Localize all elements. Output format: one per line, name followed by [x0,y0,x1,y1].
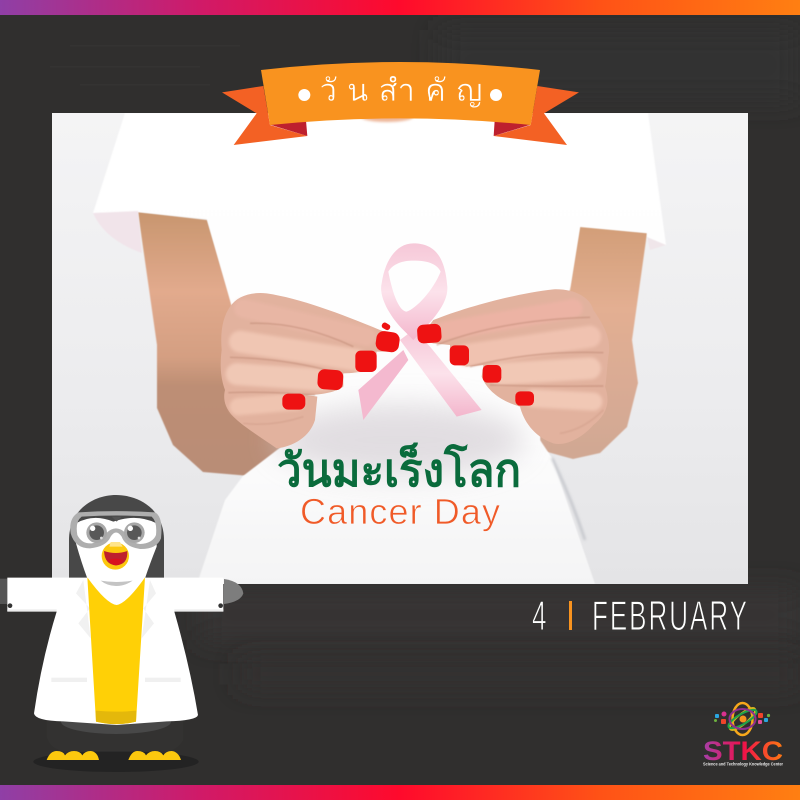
coat buttons [8,603,12,608]
banner main [261,62,540,125]
bottom gradient bar [0,785,800,800]
neck peek under banner [361,118,414,124]
penguin mascot in lab coat [0,495,243,772]
banner left tail [222,86,307,145]
hair [69,495,164,578]
goggles [70,511,162,549]
pink ribbon [358,243,482,420]
date divider [569,601,572,630]
STKC logo [703,703,783,766]
date month: FEBRUARY [592,593,747,640]
photo: woman holding pink ribbon [52,112,748,584]
banner right tail [494,86,579,145]
chin shadow [101,581,133,586]
beak and open mouth [102,542,129,570]
shirt shadow under hands [275,404,525,476]
left hand [221,293,396,448]
date [532,593,747,640]
red nails [282,322,534,410]
coat collar [76,580,156,638]
penguin belly [61,709,171,734]
logo tagline: Science and Technology Knowledge Center [703,762,783,766]
orange English heading: Cancer Day [300,491,500,532]
lab coat [7,577,223,725]
ribbon banner [222,62,579,145]
flipper tips [0,579,7,604]
banner folds [270,121,531,136]
right arm [540,226,647,459]
coat pockets [51,678,87,682]
logo dots [714,712,770,724]
date day: 4 [532,593,546,640]
logo wordmark: STKC [703,736,783,766]
ribbon and hands [221,243,609,448]
left arm [138,212,290,476]
banner title: วันสำคัญ [320,73,482,108]
green Thai heading: วันมะเร็งโลก [277,442,521,496]
yellow shirt [87,577,145,724]
face [76,518,157,578]
logo atom icon [726,703,759,735]
top gradient bar [0,0,800,15]
penguin lower body [47,718,183,752]
t-shirt [93,113,666,584]
yellow feet [47,751,181,760]
banner dots [298,89,502,101]
ground shadow [33,751,199,772]
right hand [418,289,609,444]
